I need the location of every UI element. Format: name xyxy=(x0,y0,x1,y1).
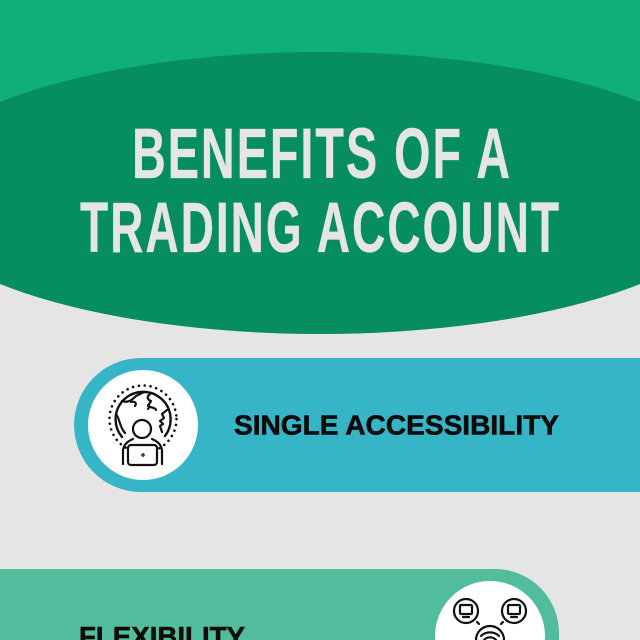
panel: flexibility xyxy=(0,569,559,640)
icon: connected devices xyxy=(454,599,526,640)
panel: single accessibility xyxy=(74,358,640,492)
header background xyxy=(0,0,640,200)
label: SINGLE ACCESSIBILITY xyxy=(234,410,559,440)
title xyxy=(80,115,561,268)
header ellipse xyxy=(0,52,640,334)
icon: person with laptop and globe xyxy=(110,386,176,465)
